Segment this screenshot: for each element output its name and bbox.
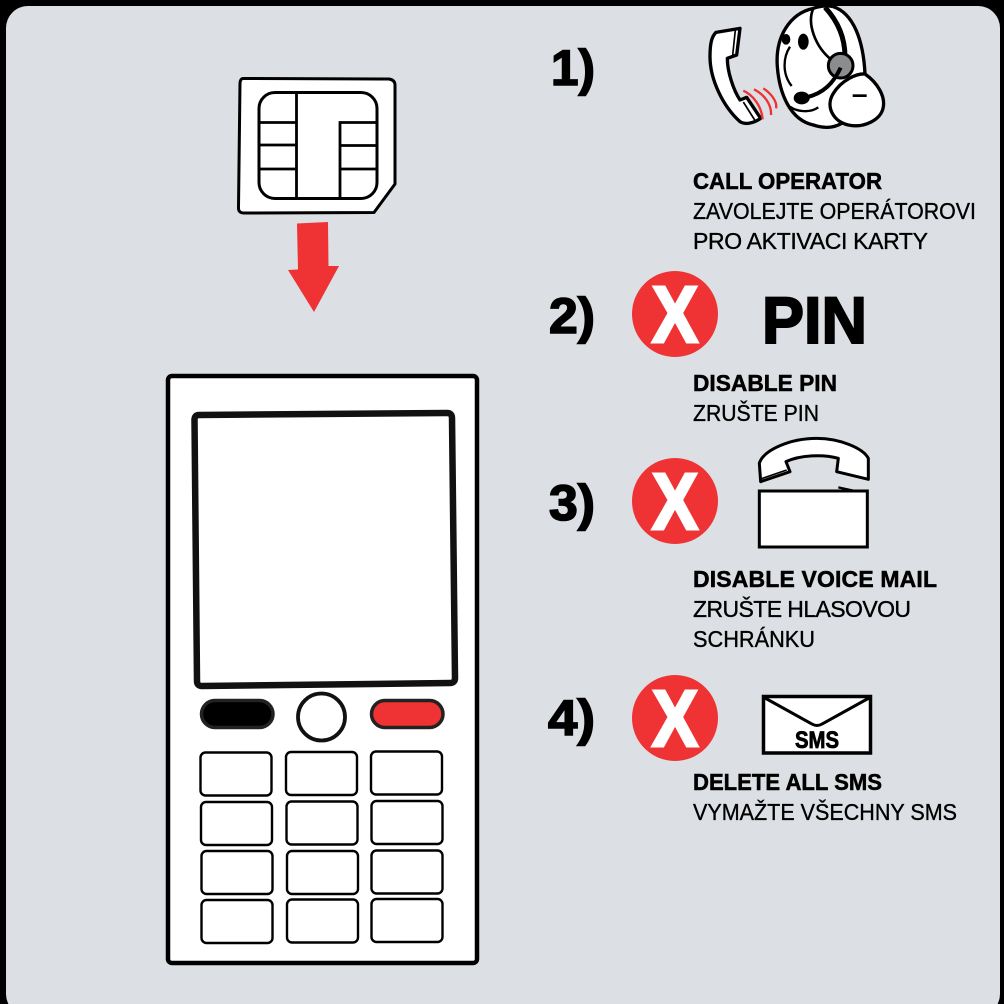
step number 3: 3) xyxy=(549,475,595,531)
black soft key xyxy=(202,700,273,728)
phone screen xyxy=(194,413,455,686)
step 1 text xyxy=(693,168,976,254)
step number 2: 2) xyxy=(549,288,595,344)
icon: SIM card xyxy=(238,78,395,213)
keypad xyxy=(200,752,442,943)
microphone boom xyxy=(794,68,841,104)
headset earpiece xyxy=(828,53,853,78)
icon: call operator xyxy=(710,6,884,127)
step 3 text: ZRUŠTE HLASOVOU xyxy=(693,595,911,622)
step 1 text: PRO AKTIVACI KARTY xyxy=(693,228,928,254)
step 3 text: DISABLE VOICE MAIL xyxy=(693,566,937,592)
step 2 text: DISABLE PIN xyxy=(693,370,837,396)
step 4 text xyxy=(693,769,957,825)
step number 4: 4) xyxy=(548,690,595,746)
icon: red X disable PIN: X xyxy=(652,270,698,359)
ear xyxy=(830,74,884,126)
step 1 text: CALL OPERATOR xyxy=(693,168,882,194)
step 3 text xyxy=(693,566,937,652)
step 3 text: SCHRÁNKU xyxy=(693,626,815,652)
red soft key xyxy=(372,700,443,728)
sound waves xyxy=(743,88,776,119)
arrow: SIM into phone xyxy=(288,222,339,312)
icon: red X delete SMS xyxy=(632,674,718,763)
operator head xyxy=(777,6,865,127)
PIN label: PIN xyxy=(762,283,867,357)
step 4 text: VYMAŽTE VŠECHNY SMS xyxy=(693,798,957,825)
phone illustration xyxy=(168,376,477,963)
step 2 text: ZRUŠTE PIN xyxy=(693,399,819,426)
icon: red X disable voice mail: X xyxy=(652,457,698,546)
icon: SMS envelope: SMS xyxy=(795,727,839,754)
step 4 text: DELETE ALL SMS xyxy=(693,769,882,795)
icon: red X disable PIN xyxy=(632,270,718,359)
centre button xyxy=(298,694,345,740)
phone body xyxy=(168,376,477,963)
step 2 text xyxy=(693,370,837,426)
icon: SMS envelope xyxy=(764,696,870,754)
icon: red X disable voice mail xyxy=(632,457,718,546)
handset xyxy=(710,28,761,123)
step number 1: 1) xyxy=(551,40,595,96)
icon: desk telephone xyxy=(759,438,868,547)
icon: red X delete SMS: X xyxy=(652,674,698,763)
step 1 text: ZAVOLEJTE OPERÁTOROVI xyxy=(693,198,976,224)
